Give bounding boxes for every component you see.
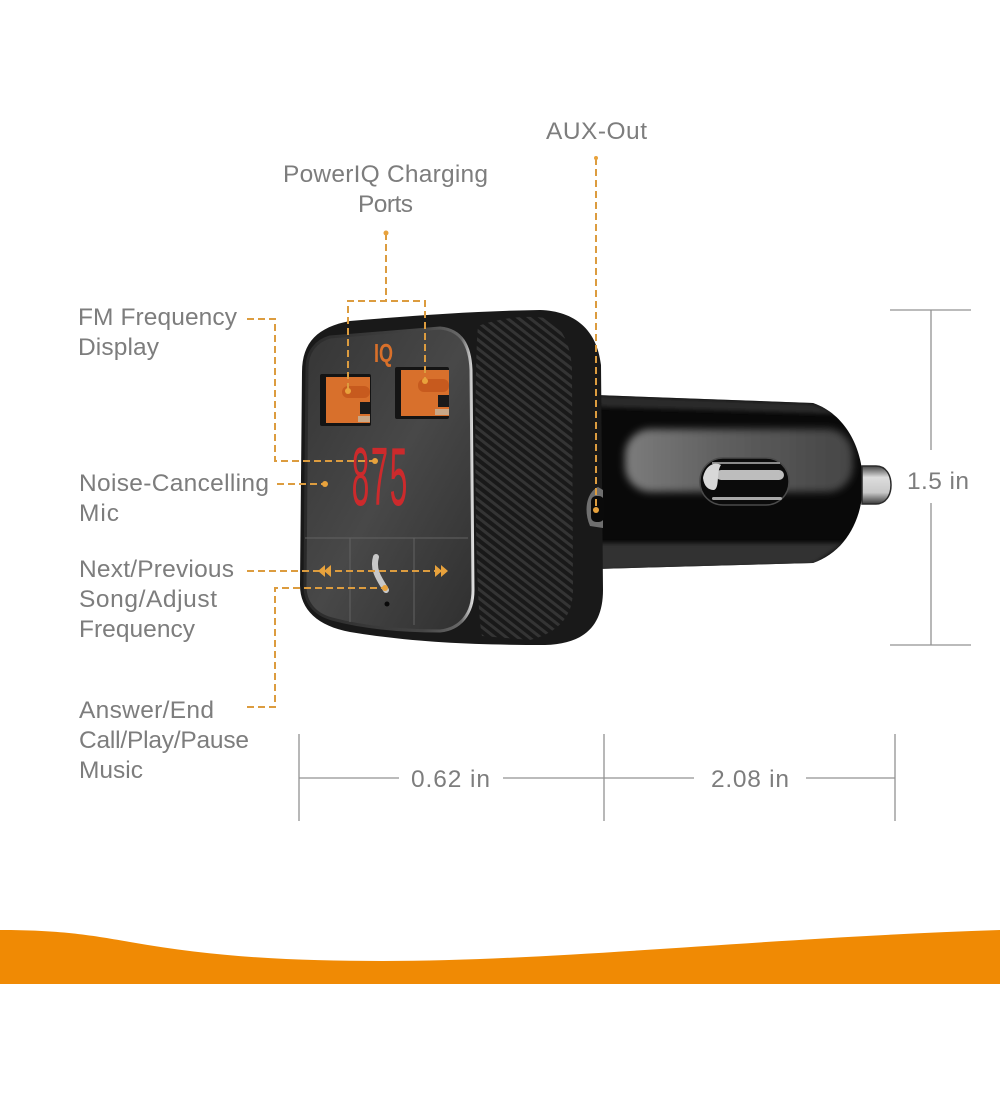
- button dividers: [305, 538, 468, 625]
- USB port left: [320, 374, 371, 426]
- label: Next/Previous Song/Adjust Frequency: Frequency: [79, 616, 196, 643]
- label: AUX-Out: AUX-Out: [546, 118, 647, 145]
- width dimension 2.08 in: [604, 734, 895, 821]
- front face: [305, 328, 473, 631]
- width dimension 0.62 in: [299, 734, 604, 821]
- label: Next/Previous Song/Adjust Frequency: Next/Previous: [79, 556, 234, 583]
- charger product image: 875: [351, 433, 408, 531]
- USB port right: [395, 367, 449, 419]
- height dimension: 1.5 in: [907, 468, 969, 495]
- phone glyph: [375, 557, 386, 590]
- plug tip: [862, 466, 891, 504]
- carbon fibre band: [475, 317, 573, 640]
- height dimension: [890, 310, 971, 645]
- plug side clip: [700, 458, 789, 505]
- wave band: [0, 930, 1000, 984]
- label: Next/Previous Song/Adjust Frequency: [79, 556, 234, 643]
- label: Noise-Cancelling Mic: [79, 470, 269, 527]
- label: Next/Previous Song/Adjust Frequency: Song/Adjust: [79, 586, 217, 613]
- label: Answer/End Call/Play/Pause Music: Call/Play/Pause: [79, 727, 249, 754]
- plug barrel: [596, 390, 866, 575]
- mic hole: [384, 602, 390, 606]
- label: Noise-Cancelling Mic: Mic: [79, 500, 119, 527]
- charger product image: [300, 310, 891, 645]
- IQ logo: IQ: [374, 338, 393, 368]
- label: PowerIQ Charging Ports: Ports: [358, 191, 413, 218]
- label: Answer/End Call/Play/Pause Music: Answer/End: [79, 697, 214, 724]
- label: Answer/End Call/Play/Pause Music: Music: [79, 757, 143, 784]
- label: FM Frequency Display: [78, 304, 238, 361]
- width dimension 0.62 in: 0.62 in: [411, 766, 490, 793]
- label: PowerIQ Charging Ports: PowerIQ Charging: [283, 161, 488, 188]
- label: FM Frequency Display: Display: [78, 334, 160, 361]
- label: FM Frequency Display: FM Frequency: [78, 304, 238, 331]
- leader lines: [247, 156, 599, 707]
- width dimension 2.08 in: 2.08 in: [711, 766, 789, 793]
- label: PowerIQ Charging Ports: [283, 161, 488, 218]
- label: Answer/End Call/Play/Pause Music: [79, 697, 249, 784]
- body shell: [300, 310, 603, 645]
- label: Noise-Cancelling Mic: Noise-Cancelling: [79, 470, 269, 497]
- AUX jack: [587, 487, 604, 528]
